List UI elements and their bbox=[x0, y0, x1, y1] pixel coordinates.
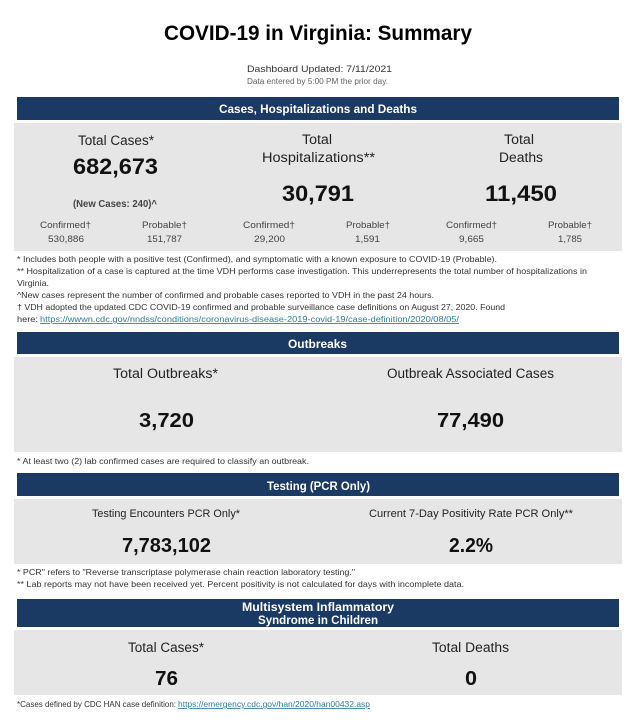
footnotes: cases: ^New cases represent the number of confirmed and probable cases reported to VDH in the past 24 hours. bbox=[17, 290, 434, 300]
section banner: cases bbox=[17, 97, 619, 120]
footnote: MIS-C: https://emergency.cdc.gov/han/2020/han00432.asp bbox=[178, 699, 370, 709]
stat: MIS-C total cases: 76 bbox=[155, 667, 178, 690]
stat: total cases: 151,787 bbox=[147, 234, 182, 245]
footnotes: cases: Virginia. bbox=[17, 278, 49, 288]
stat: total outbreaks: 3,720 bbox=[139, 409, 194, 432]
section banner: MIS-C: Multisystem Inflammatory bbox=[242, 600, 394, 614]
section banner: outbreaks: Outbreaks bbox=[288, 337, 347, 351]
stat: testing encounters: Testing Encounters PCR Only* bbox=[92, 508, 241, 520]
stat: total hospitalizations: 29,200 bbox=[254, 234, 285, 245]
stat: outbreak associated cases bbox=[387, 366, 554, 432]
footnotes: cases: https://wwwn.cdc.gov/nndss/conditions/coronavirus-disease-2019-covid-19/case-definition/2020/08/05/ bbox=[40, 314, 460, 324]
footnotes: testing bbox=[17, 567, 464, 589]
stat: total deaths: Confirmed† bbox=[446, 220, 497, 231]
stat: total hospitalizations: Confirmed† bbox=[243, 220, 295, 231]
footnotes: cases: ** Hospitalization of a case is captured at the time VDH performs case investigation. This underrepresents the total number of hospitalizations in bbox=[17, 266, 587, 276]
stat: total deaths bbox=[446, 132, 592, 245]
gray card: cases bbox=[14, 123, 622, 251]
stat: outbreak associated cases: 77,490 bbox=[437, 409, 504, 432]
gray card: outbreaks bbox=[14, 357, 622, 452]
stat: total cases: 682,673 bbox=[73, 154, 158, 179]
stat: positivity rate: Current 7-Day Positivity Rate PCR Only** bbox=[369, 508, 574, 520]
stat: MIS-C total deaths bbox=[432, 640, 509, 690]
stat: testing encounters: 7,783,102 bbox=[122, 534, 211, 557]
footnotes: cases bbox=[17, 254, 587, 324]
stat: MIS-C total deaths: 0 bbox=[465, 667, 477, 690]
stat: MIS-C total cases bbox=[128, 640, 205, 690]
section banner: testing bbox=[17, 473, 619, 496]
stat: positivity rate bbox=[369, 508, 574, 557]
stat: total deaths: 11,450 bbox=[485, 181, 557, 206]
stat: total cases: 530,886 bbox=[48, 234, 84, 245]
stat: total deaths: Probable† bbox=[548, 220, 592, 231]
footnote: MIS-C: *Cases defined by CDC HAN case definition: bbox=[17, 699, 176, 709]
stat: total cases: Probable† bbox=[142, 220, 187, 231]
stat: total cases: Total Cases* bbox=[78, 133, 155, 148]
panel: multisystem inflammatory syndrome bbox=[14, 599, 622, 695]
stat: total outbreaks bbox=[113, 366, 219, 432]
panel: cases, hospitalizations and deaths bbox=[14, 97, 622, 251]
stat: positivity rate: 2.2% bbox=[449, 534, 493, 557]
stat: total hospitalizations: Hospitalizations** bbox=[262, 150, 376, 165]
stat: total outbreaks: Total Outbreaks* bbox=[113, 366, 219, 381]
section banner: MIS-C: Syndrome in Children bbox=[258, 613, 378, 627]
footnote: outbreaks: * At least two (2) lab confirmed cases are required to classify an outbreak. bbox=[17, 456, 309, 466]
gray card: MIS-C bbox=[14, 630, 622, 695]
footnote: MIS-C bbox=[17, 699, 370, 709]
stat: MIS-C total deaths: Total Deaths bbox=[432, 640, 509, 655]
stat: total cases: (New Cases: 240)^ bbox=[73, 199, 157, 210]
stat: total cases bbox=[40, 133, 187, 245]
stat: total deaths: Total bbox=[504, 132, 534, 147]
title: COVID-19 in Virginia: Summary bbox=[164, 22, 472, 45]
dashboard updated date bbox=[247, 64, 392, 86]
stat: total deaths: 1,785 bbox=[558, 234, 582, 245]
stat: total hospitalizations: Total bbox=[302, 132, 332, 147]
stat: total hospitalizations bbox=[243, 132, 390, 245]
stat: outbreak associated cases: Outbreak Associated Cases bbox=[387, 366, 554, 381]
section banner: cases: Cases, Hospitalizations and Deaths bbox=[219, 102, 417, 116]
stat: total deaths: 9,665 bbox=[459, 234, 484, 245]
section banner: testing: Testing (PCR Only) bbox=[267, 479, 370, 493]
stat: total hospitalizations: 1,591 bbox=[355, 234, 380, 245]
stat: MIS-C total cases: Total Cases* bbox=[128, 640, 205, 655]
panel: outbreaks bbox=[14, 332, 622, 452]
stat: total hospitalizations: Probable† bbox=[346, 220, 390, 231]
footnotes: testing: ** Lab reports may not have been received yet. Percent positivity is not calculated for days with incomplete data. bbox=[17, 579, 464, 589]
stat: total cases: Confirmed† bbox=[40, 220, 91, 231]
footnotes: cases: † VDH adopted the updated CDC COVID-19 confirmed and probable surveillance case definitions on August 27, 2020. Found bbox=[17, 302, 505, 312]
dashboard updated date: Dashboard Updated: 7/11/2021 bbox=[247, 64, 392, 75]
dashboard updated date: Data entered by 5:00 PM the prior day. bbox=[247, 77, 388, 86]
footnotes: cases: here: bbox=[17, 314, 38, 324]
stat: testing encounters bbox=[92, 508, 241, 557]
section banner: outbreaks bbox=[17, 332, 619, 354]
section banner: MIS-C bbox=[17, 599, 619, 627]
footnotes: cases: * Includes both people with a positive test (Confirmed), and symptomatic with a known exposure to COVID-19 (Probable). bbox=[17, 254, 497, 264]
stat: total hospitalizations: 30,791 bbox=[282, 181, 354, 206]
footnotes: testing: * PCR" refers to "Reverse transcriptase polymerase chain reaction laboratory testing." bbox=[17, 567, 355, 577]
stat: total deaths: Deaths bbox=[499, 150, 543, 165]
gray card: testing bbox=[14, 499, 622, 564]
panel: testing bbox=[14, 473, 622, 564]
